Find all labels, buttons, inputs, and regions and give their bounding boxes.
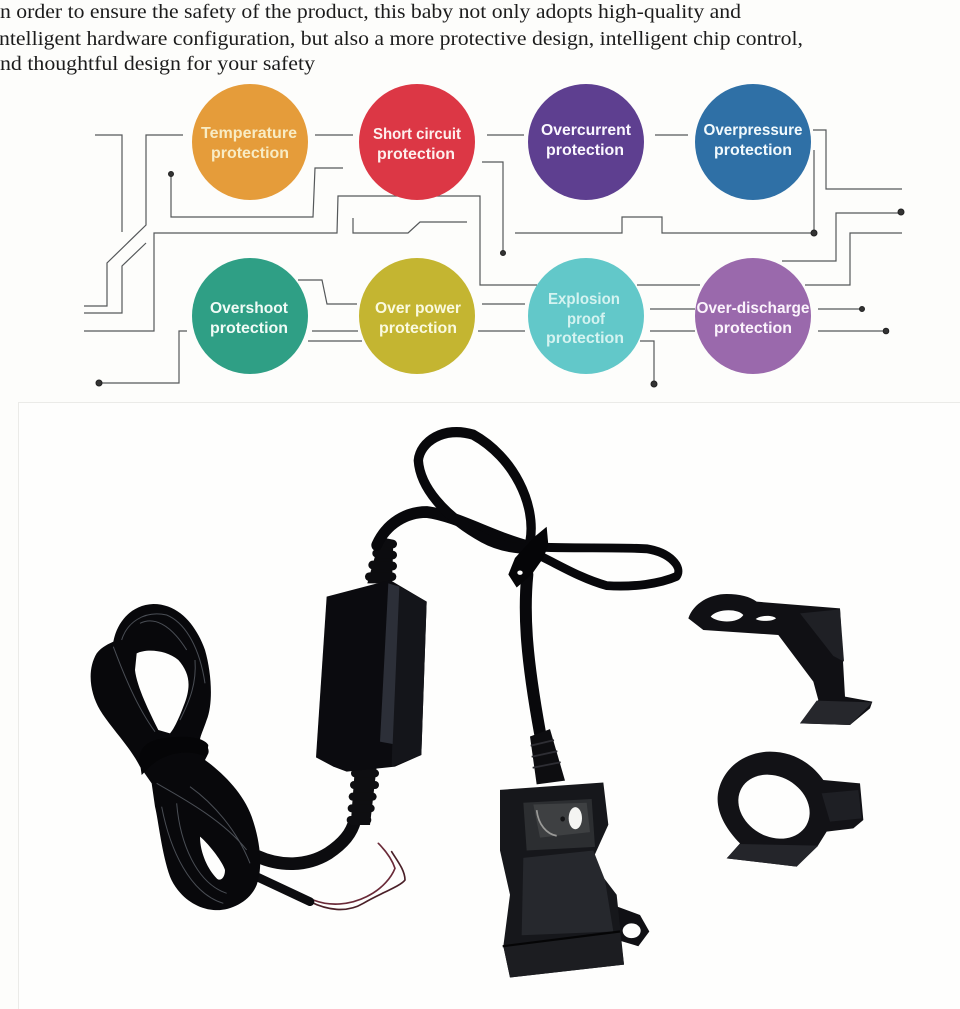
coil highlights xyxy=(113,614,250,903)
lower strain relief xyxy=(351,767,377,825)
circle: over power protection: Over power xyxy=(375,300,461,317)
circuit end dots xyxy=(96,172,904,387)
circle: short circuit protection: protection xyxy=(377,146,455,163)
circle: overpressure protection: Overpressure xyxy=(704,122,803,139)
cable between coil and box xyxy=(257,820,355,864)
coil tie xyxy=(139,737,208,775)
circle: overpressure protection: protection xyxy=(714,142,792,159)
socket body xyxy=(500,782,624,978)
intro text: n order to ensure the safety of the product, this baby not only adopts high-quality and xyxy=(0,1,741,23)
product photo panel xyxy=(18,402,960,1009)
circle: overshoot protection: protection xyxy=(210,320,288,337)
top cable xyxy=(377,432,678,733)
circle: explosion proof protection: Explosion xyxy=(548,291,620,308)
circle: temperature protection xyxy=(192,84,308,200)
circle: overshoot protection xyxy=(192,258,308,374)
circle: temperature protection: Temperature xyxy=(201,125,297,142)
circle: over-discharge protection: Over-discharge xyxy=(696,300,810,317)
product: coiled input cable and converter box xyxy=(91,538,427,910)
circle: temperature protection: protection xyxy=(211,145,289,162)
intro text: nd thoughtful design for your safety xyxy=(0,53,315,75)
intro text xyxy=(0,1,803,75)
circle: overcurrent protection: protection xyxy=(546,142,624,159)
coil silhouette xyxy=(91,604,260,910)
circle: overpressure protection xyxy=(695,84,811,200)
circle: short circuit protection: Short circuit xyxy=(373,126,461,143)
circle: overshoot protection: Overshoot xyxy=(210,300,288,317)
socket side tab xyxy=(613,906,649,946)
socket switch xyxy=(523,799,595,851)
circuit lines connecting the protection circles xyxy=(84,130,902,384)
product: cable loops and USB socket xyxy=(377,432,678,978)
circle: overcurrent protection: Overcurrent xyxy=(541,122,631,139)
converter box xyxy=(316,580,427,772)
product: mounting bracket xyxy=(688,594,872,725)
socket strain relief xyxy=(530,729,565,784)
circle: short circuit protection xyxy=(359,84,475,200)
red and black stripped wires xyxy=(257,843,405,909)
circle: over power protection: protection xyxy=(379,320,457,337)
circle: over-discharge protection: protection xyxy=(714,320,792,337)
upper strain relief xyxy=(367,538,393,583)
circle: over-discharge protection xyxy=(695,258,811,374)
circle: explosion proof protection xyxy=(528,258,644,374)
intro text: ntelligent hardware configuration, but also a more protective design, intelligent chip control, xyxy=(0,28,803,50)
circle: overcurrent protection xyxy=(528,84,644,200)
circle: explosion proof protection: protection xyxy=(546,330,624,347)
product: ring clamp xyxy=(718,752,863,867)
circle: over power protection xyxy=(359,258,475,374)
cable tie xyxy=(508,527,548,587)
circle: explosion proof protection: proof xyxy=(567,311,606,328)
